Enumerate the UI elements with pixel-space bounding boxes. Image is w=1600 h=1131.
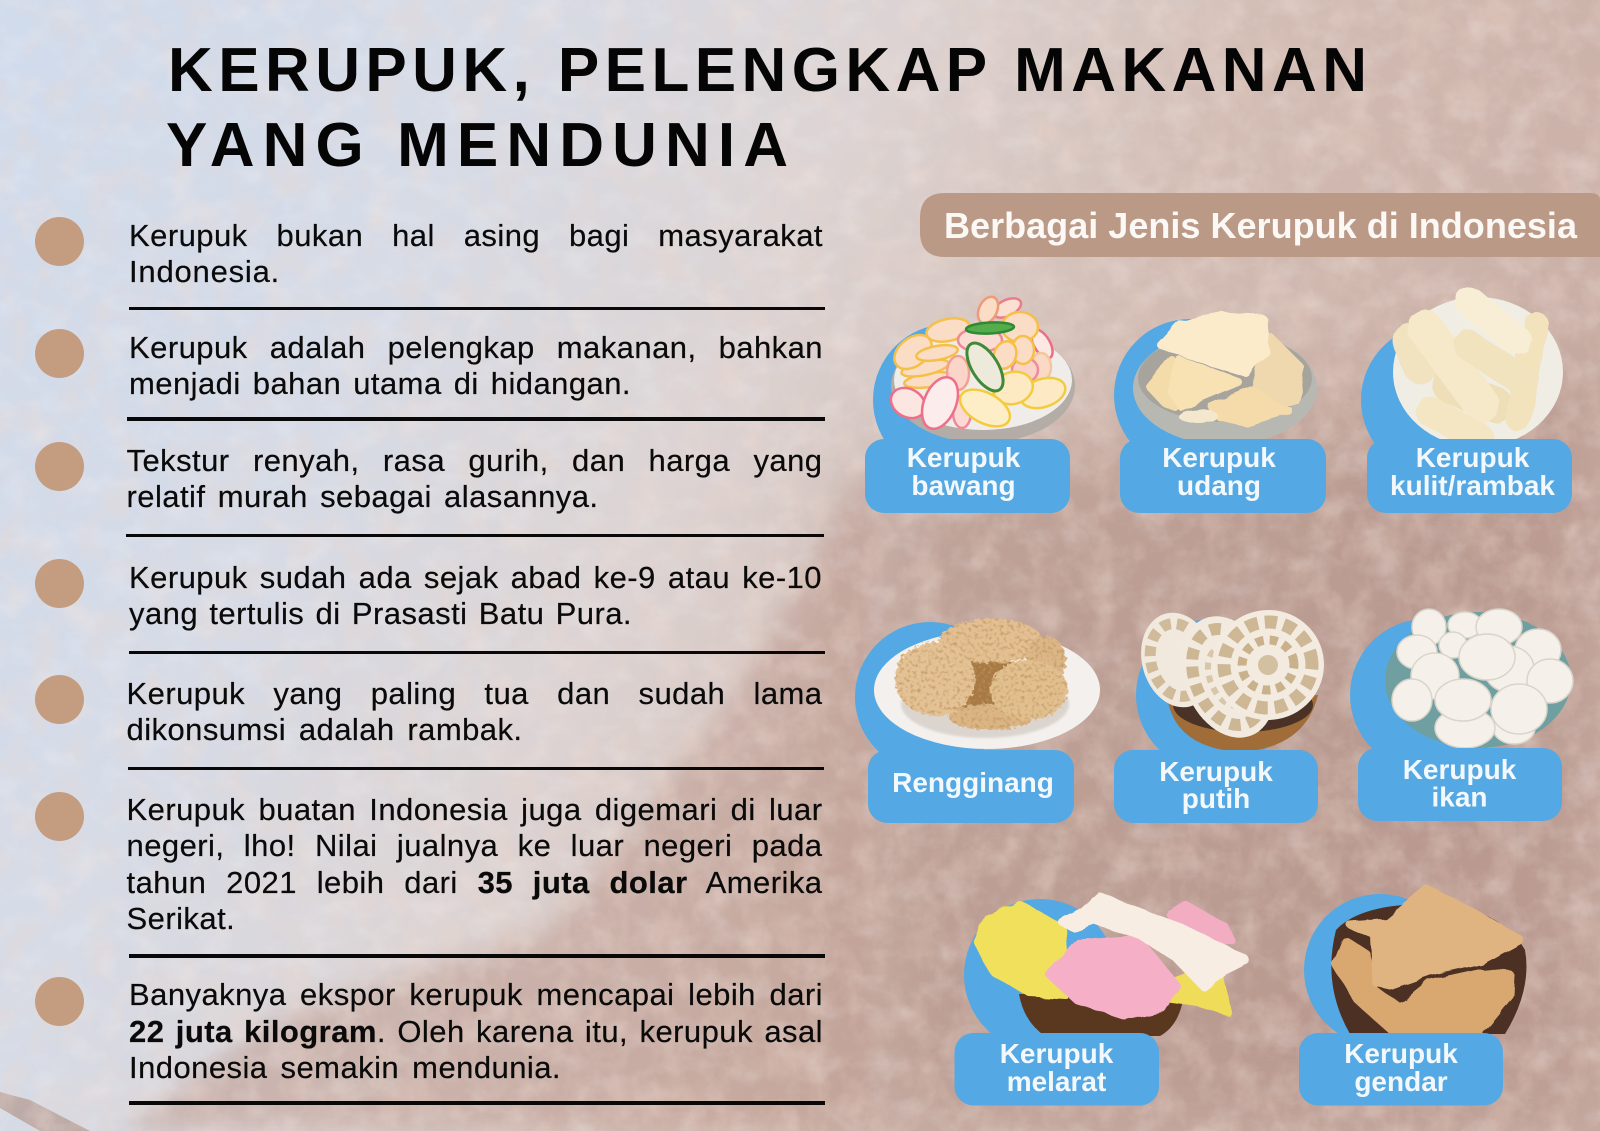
label 6 (1358, 748, 1562, 821)
bullet 1 (35, 216, 84, 266)
heading pill (920, 193, 1600, 257)
label 7: Kerupuk (1000, 1038, 1114, 1069)
list item 2 (35, 329, 825, 421)
list item 3 (35, 442, 824, 537)
label 6: ikan (1431, 782, 1488, 812)
label 4: Rengginang (892, 767, 1054, 798)
bullet 6 (35, 792, 84, 840)
text 5: dikonsumsi adalah rambak. (126, 712, 522, 747)
plate and crackers 3 (1393, 297, 1563, 447)
card: kerupuk kulit/rambak (1361, 297, 1572, 513)
label 1: Kerupuk (907, 442, 1021, 473)
blob 7 (964, 899, 1116, 1051)
card: kerupuk udang (1114, 316, 1326, 513)
list item 1 (35, 217, 825, 310)
text 2: menjadi bahan utama di hidangan. (129, 366, 631, 401)
title: YANG MENDUNIA (166, 111, 788, 180)
label 5: Kerupuk (1159, 756, 1273, 787)
bowl and crackers 2 (1133, 316, 1317, 445)
list item 7 (35, 977, 825, 1105)
text 6: Kerupuk buatan Indonesia juga digemari di luar (126, 792, 822, 827)
card: rengginang (855, 619, 1100, 823)
plate and rice cakes (874, 619, 1100, 749)
text 6: tahun 2021 lebih dari 35 juta dolar Amerika (126, 865, 822, 900)
text 6: negeri, lho! Nilai jualnya ke luar negeri pada (126, 828, 822, 863)
label 5 (1114, 750, 1318, 823)
text 1: Indonesia. (129, 254, 280, 289)
heading pill: Berbagai Jenis Kerupuk di Indonesia (944, 205, 1578, 246)
bullet 3 (35, 442, 84, 491)
text 4: yang tertulis di Prasasti Batu Pura. (129, 596, 632, 631)
label 8: gendar (1354, 1066, 1448, 1097)
text 1: Kerupuk bukan hal asing bagi masyarakat (129, 218, 823, 253)
bullet 7 (35, 976, 84, 1026)
text 4 (129, 560, 822, 631)
label 7 (954, 1033, 1159, 1106)
title: KERUPUK, PELENGKAP MAKANAN (168, 36, 1367, 105)
text 6 (126, 792, 822, 936)
blob 6 (1350, 619, 1502, 771)
label 5: putih (1182, 783, 1250, 814)
title (166, 36, 1367, 180)
text 2: Kerupuk adalah pelengkap makanan, bahkan (129, 330, 823, 365)
blob 1 (873, 324, 1025, 476)
plate and crackers 1 (885, 294, 1075, 443)
label 1 (865, 439, 1070, 513)
label 2: udang (1177, 470, 1261, 501)
text 6: Serikat. (126, 901, 235, 936)
text 7: Indonesia semakin mendunia. (129, 1050, 561, 1085)
label 2 (1120, 439, 1326, 513)
bowl and crackers 7 (977, 896, 1246, 1036)
label 7: melarat (1007, 1066, 1106, 1097)
bowl and crackers 8 (1331, 889, 1526, 1034)
label 4 (868, 750, 1074, 823)
label 8: Kerupuk (1344, 1038, 1458, 1069)
bullet 2 (35, 328, 84, 378)
text 3: relatif murah sebagai alasannya. (126, 479, 598, 514)
label 2: Kerupuk (1162, 442, 1276, 473)
text 7: Banyaknya ekspor kerupuk mencapai lebih dari (129, 977, 823, 1012)
plate and crackers 6 (1385, 609, 1573, 748)
list item 5 (35, 675, 824, 770)
card: kerupuk ikan (1350, 609, 1573, 821)
blob 2 (1114, 319, 1266, 471)
basket and crackers 5 (1131, 601, 1333, 752)
label 1: bawang (911, 470, 1016, 501)
text 7 (129, 977, 823, 1085)
text 5: Kerupuk yang paling tua dan sudah lama (126, 676, 822, 711)
label 3: Kerupuk (1416, 442, 1530, 473)
list item 4 (35, 559, 825, 654)
card: kerupuk putih (1114, 601, 1333, 823)
text 7: 22 juta kilogram. Oleh karena itu, kerupuk asal (129, 1014, 823, 1049)
text 2 (129, 330, 823, 401)
blob 3 (1361, 324, 1513, 476)
bullet 4 (35, 558, 84, 608)
text 1 (129, 218, 823, 289)
bullet 5 (35, 674, 84, 724)
label 8 (1299, 1033, 1503, 1106)
card: kerupuk melarat (954, 896, 1246, 1106)
text 5 (126, 676, 822, 747)
list item 6 (35, 792, 825, 958)
panel: jenis kerupuk (855, 193, 1600, 1106)
label 3 (1367, 439, 1572, 513)
label 6: Kerupuk (1403, 754, 1517, 785)
text 4: Kerupuk sudah ada sejak abad ke-9 atau ke-10 (129, 560, 822, 595)
card: kerupuk gendar (1299, 889, 1526, 1106)
text 3 (126, 443, 822, 514)
blob 5 (1136, 619, 1288, 771)
blob 4 (855, 622, 1005, 772)
label 3: kulit/rambak (1390, 470, 1555, 501)
card: kerupuk bawang (865, 294, 1075, 513)
text 3: Tekstur renyah, rasa gurih, dan harga yang (126, 443, 822, 478)
blob 8 (1304, 894, 1456, 1046)
